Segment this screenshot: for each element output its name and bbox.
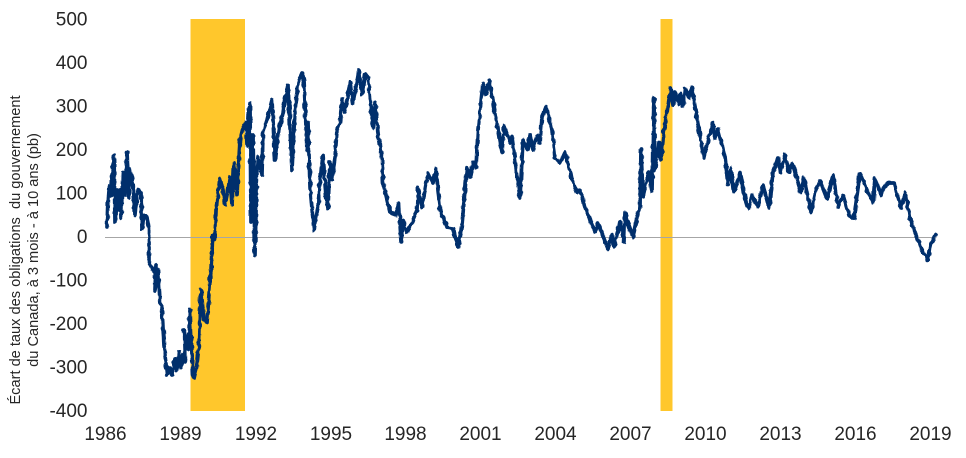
- y axis labels: 300: [56, 96, 88, 118]
- x axis labels: 2010: [684, 424, 727, 445]
- y axis labels: -300: [49, 358, 88, 378]
- x axis labels: 2004: [534, 424, 577, 445]
- x axis labels: 1998: [384, 424, 427, 445]
- x axis labels: 1989: [159, 424, 202, 445]
- y axis labels: 200: [56, 140, 88, 161]
- y axis title: Écart de taux des obligations du gouvernement: [7, 95, 24, 405]
- y axis labels: -100: [49, 270, 88, 292]
- x axis labels: 1995: [310, 424, 352, 445]
- x axis labels: 2013: [759, 424, 802, 445]
- x axis labels: 2001: [459, 424, 502, 445]
- recession band 2008: [660, 19, 672, 411]
- recession band 1990-1992: [190, 19, 245, 411]
- y axis labels: 400: [56, 53, 88, 74]
- zero line: [105, 236, 936, 238]
- y axis title: [7, 95, 42, 405]
- y axis labels: -400: [49, 401, 88, 422]
- x axis labels: 1986: [84, 424, 127, 445]
- y axis labels: 500: [56, 10, 88, 30]
- y axis labels: -200: [49, 314, 88, 335]
- x axis labels: 2007: [609, 424, 652, 445]
- y axis labels: [49, 10, 88, 422]
- y axis labels: 0: [77, 227, 88, 248]
- x axis labels: [84, 424, 952, 445]
- y axis labels: 100: [56, 184, 88, 204]
- y axis title: du Canada, à 3 mois - à 10 ans (pb): [26, 133, 42, 367]
- x axis labels: 2016: [834, 424, 877, 445]
- x axis labels: 1992: [235, 424, 277, 445]
- spread data line: [107, 70, 936, 378]
- x axis labels: 2019: [909, 424, 952, 445]
